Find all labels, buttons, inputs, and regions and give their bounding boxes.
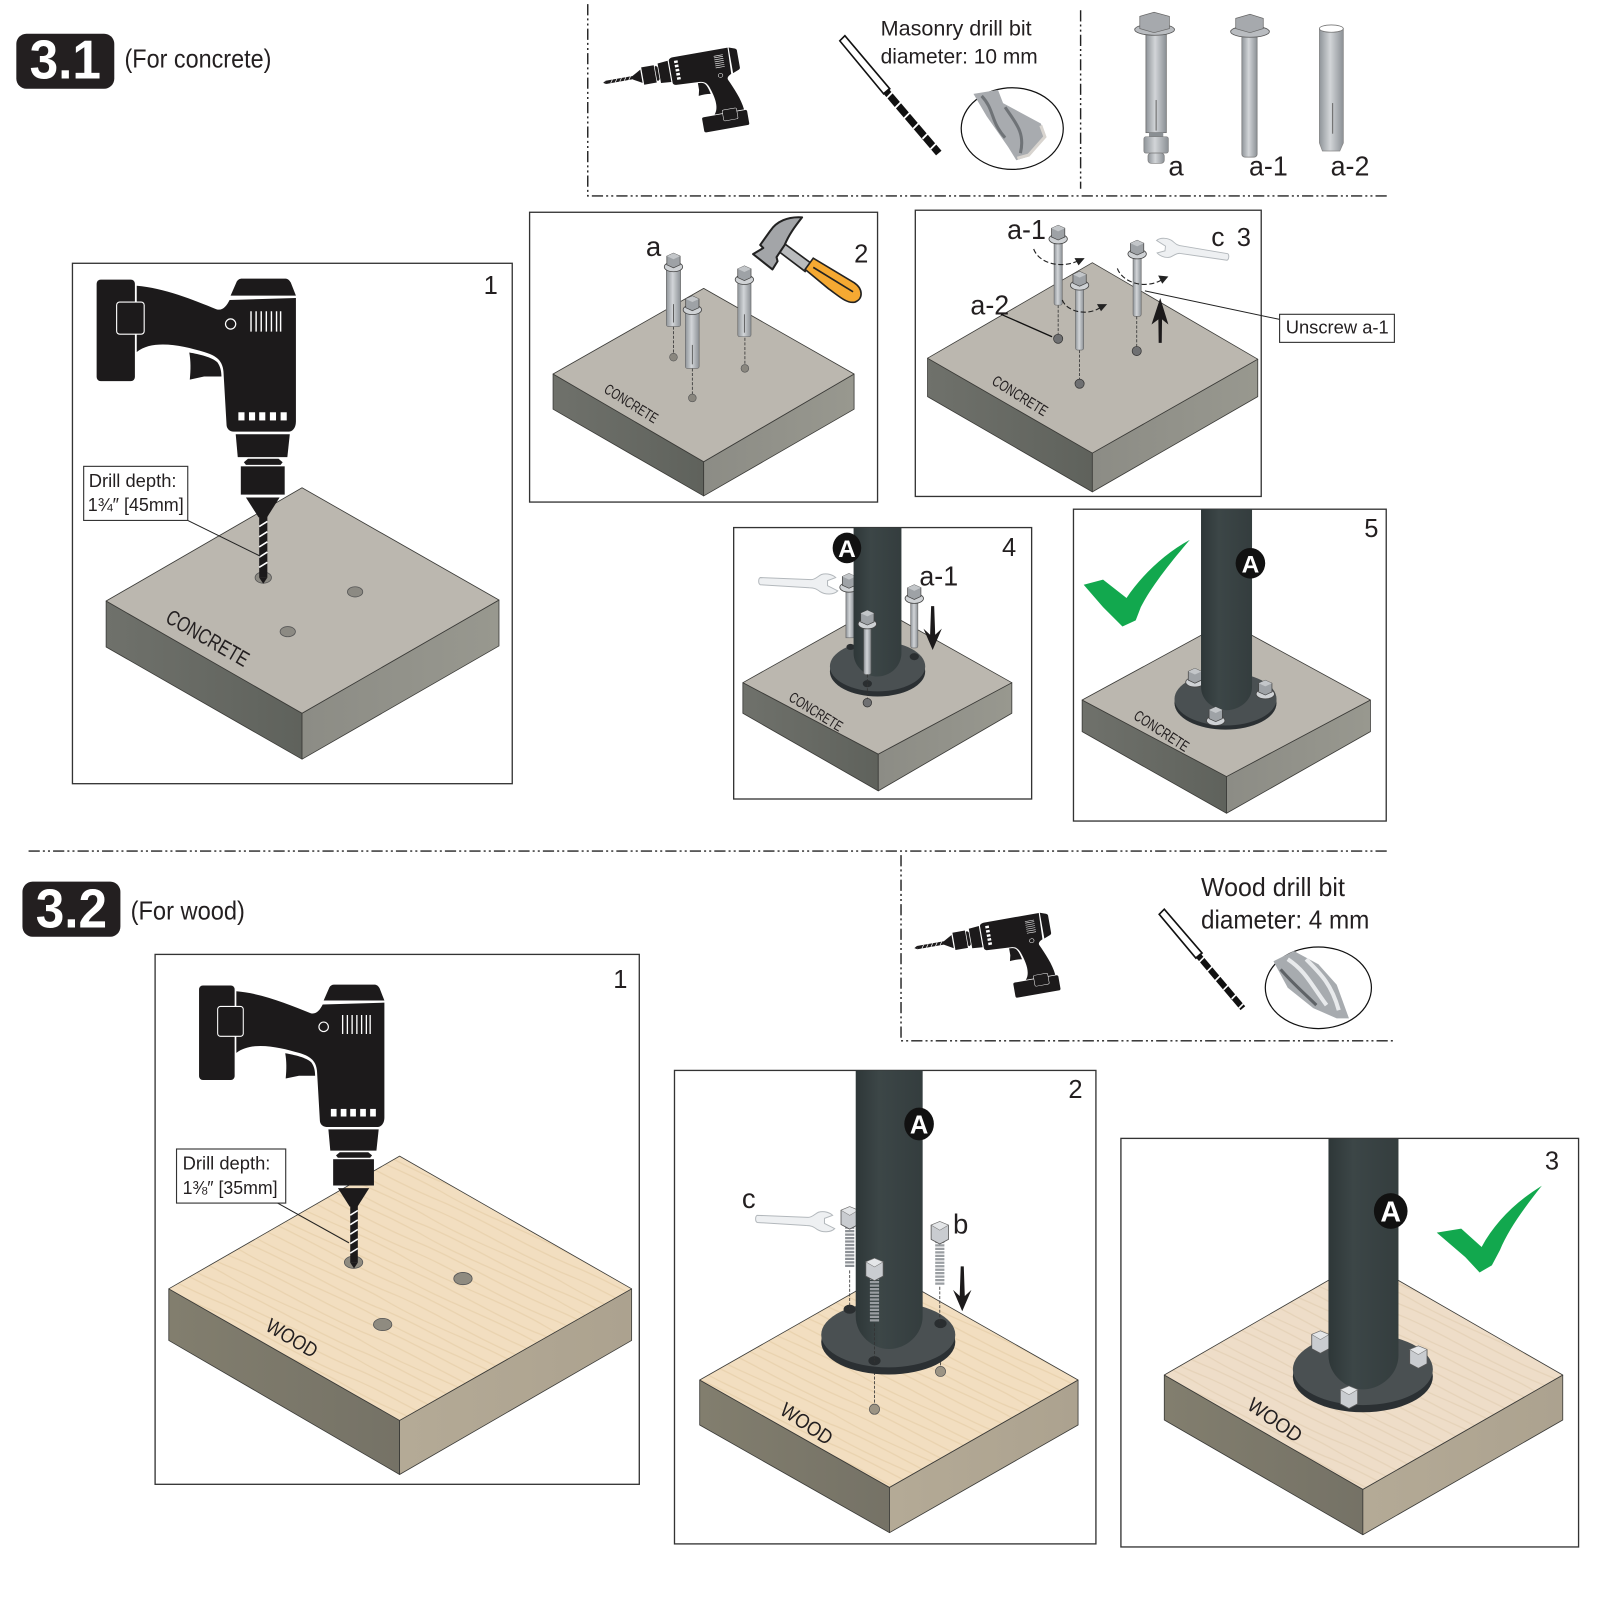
heading badge: 3.1: 3.1 bbox=[30, 29, 101, 91]
icon: large drill bbox=[199, 985, 384, 1268]
step number 1: 1 bbox=[613, 966, 627, 994]
panel: wood step 2 bbox=[674, 1070, 1096, 1544]
text: masonry drill bit diameter: Masonry drill bit bbox=[881, 18, 1032, 41]
lag bolt behind pole bbox=[841, 1207, 858, 1309]
slab label: CONCRETE bbox=[989, 373, 1050, 420]
step number 5: 5 bbox=[1364, 515, 1378, 543]
heading text: for concrete: (For concrete) bbox=[124, 45, 271, 73]
slab label: CONCRETE bbox=[786, 690, 845, 735]
leader: a-2 bbox=[1001, 314, 1052, 337]
icon: bolt a-1 bbox=[1231, 14, 1269, 157]
concrete slab bbox=[553, 288, 854, 496]
wood block bbox=[169, 1156, 632, 1475]
holes in wood bbox=[869, 1362, 946, 1414]
block label: WOOD bbox=[262, 1315, 321, 1363]
icon: green check mark bbox=[1084, 540, 1190, 627]
step number 1: 1 bbox=[484, 272, 498, 300]
badge A: A bbox=[838, 536, 856, 563]
panel: concrete step 1 bbox=[72, 263, 512, 784]
labels: a-1, a-2, c, 3: c bbox=[1211, 222, 1224, 252]
badge A: A bbox=[910, 1112, 928, 1140]
bolts bbox=[858, 585, 923, 675]
wood block bbox=[1164, 1260, 1563, 1535]
lag bolts bbox=[866, 1222, 948, 1362]
drill holes bbox=[255, 572, 363, 637]
icon: wood drill bit bbox=[1159, 909, 1246, 1008]
icon: wrench bbox=[1155, 237, 1230, 264]
bolts a-1 bbox=[1049, 225, 1146, 350]
icon: sleeve a-2 bbox=[1319, 25, 1343, 151]
base plate bbox=[1293, 1334, 1433, 1412]
labels: a-1, a-2, c, 3 bbox=[970, 214, 1251, 320]
pole bbox=[854, 528, 901, 677]
labels: c, b bbox=[742, 1183, 968, 1240]
pole bbox=[856, 1070, 923, 1349]
base plate bbox=[821, 1302, 955, 1375]
arrow: down bbox=[923, 606, 942, 650]
text: wood drill bit diameter: diameter: 4 mm bbox=[1201, 907, 1369, 935]
icon: large drill bbox=[97, 279, 296, 584]
panel: wood step 3 bbox=[1121, 1138, 1579, 1547]
icon: masonry drill bit bbox=[840, 36, 939, 153]
arrow: down bbox=[953, 1266, 971, 1311]
callout: drill depth: Drill depth: bbox=[183, 1152, 270, 1173]
pole bbox=[1328, 1139, 1398, 1389]
block label: WOOD bbox=[776, 1399, 836, 1450]
hole in concrete bbox=[863, 675, 872, 707]
labels: a, a-1, a-2 bbox=[1168, 151, 1369, 182]
front bolt bbox=[1340, 1386, 1358, 1408]
slab label: CONCRETE bbox=[601, 382, 661, 427]
panel: concrete step 3 bbox=[915, 210, 1261, 496]
panel: concrete step 5 bbox=[1073, 509, 1386, 821]
step number 3: 3 bbox=[1545, 1147, 1559, 1175]
step number 2: 2 bbox=[854, 240, 868, 268]
holes and guide lines bbox=[670, 327, 749, 402]
icon: green check mark bbox=[1437, 1186, 1542, 1272]
concrete slab bbox=[106, 488, 499, 759]
labels: c, b: c bbox=[742, 1183, 756, 1214]
slab label: CONCRETE bbox=[162, 605, 253, 672]
step number 2: 2 bbox=[1068, 1076, 1083, 1104]
icon: wrench bbox=[759, 574, 838, 594]
wood block bbox=[700, 1272, 1078, 1533]
bolts bbox=[1312, 1331, 1427, 1368]
heading badge: 3.2: 3.2 bbox=[36, 878, 107, 940]
concrete slab bbox=[743, 607, 1012, 791]
labels: a-1, a-2, c, 3: 3 bbox=[1237, 224, 1251, 252]
base plate bbox=[1174, 672, 1277, 730]
callout: drill depth bbox=[84, 466, 260, 556]
divider bbox=[29, 850, 1389, 852]
icon: small drill bbox=[912, 911, 1061, 1014]
base plate bbox=[830, 641, 925, 696]
labels: a, a-1, a-2: a bbox=[1168, 151, 1184, 182]
drill holes bbox=[344, 1256, 472, 1331]
bolt behind pole bbox=[840, 573, 858, 638]
badge A: A bbox=[1380, 1196, 1401, 1228]
callout: drill depth bbox=[177, 1149, 349, 1243]
anchors bbox=[664, 253, 754, 368]
labels: a, a-1, a-2: a-1 bbox=[1249, 151, 1288, 182]
panel: wood step 1 bbox=[155, 954, 639, 1484]
concrete slab bbox=[928, 263, 1258, 492]
panel: wood tools bbox=[901, 855, 1395, 1041]
labels: a, a-1, a-2: a-2 bbox=[1331, 151, 1369, 182]
icon: hammer bbox=[753, 217, 861, 302]
holes and guide lines bbox=[1054, 305, 1141, 388]
callout: drill depth: 1¾″ [45mm] bbox=[88, 494, 184, 515]
badge A bbox=[904, 1108, 934, 1140]
badge A bbox=[1374, 1193, 1408, 1229]
block label: WOOD bbox=[1243, 1394, 1306, 1447]
labels: c, b: b bbox=[953, 1209, 968, 1240]
labels: a-1, a-2, c, 3: a-1 bbox=[1007, 214, 1046, 245]
front bolt bbox=[1207, 707, 1225, 726]
arrow: up bbox=[1152, 298, 1168, 343]
icon: masonry bit tip close-up bbox=[961, 88, 1063, 169]
icon: wrench bbox=[756, 1212, 835, 1232]
slab label: CONCRETE bbox=[1130, 707, 1192, 756]
panel: concrete step 4 bbox=[734, 528, 1032, 799]
callout: drill depth: Drill depth: bbox=[89, 470, 177, 491]
icon: wood bit tip close-up bbox=[1265, 947, 1371, 1029]
bolts bbox=[1186, 668, 1274, 699]
heading text: for wood: (For wood) bbox=[131, 897, 245, 925]
text: wood drill bit diameter: Wood drill bit bbox=[1201, 874, 1345, 902]
label: a-1: a-1 bbox=[919, 561, 958, 592]
icon: anchor a bbox=[1135, 12, 1174, 163]
text: masonry drill bit diameter: diameter: 10 mm bbox=[881, 45, 1038, 68]
badge A bbox=[1236, 548, 1265, 579]
concrete slab bbox=[1082, 621, 1370, 813]
badge A bbox=[833, 533, 861, 563]
panel: concrete step 2 bbox=[530, 212, 878, 502]
icon: small drill bbox=[601, 46, 750, 148]
panel: concrete tools and parts bbox=[588, 4, 1389, 196]
badge A: A bbox=[1242, 551, 1260, 578]
labels: a-1, a-2, c, 3: a-2 bbox=[970, 289, 1009, 320]
label: a: a bbox=[646, 231, 662, 262]
callout: drill depth: 1⅜″ [35mm] bbox=[183, 1177, 278, 1198]
pole bbox=[1201, 509, 1252, 710]
rotation arrows bbox=[1034, 249, 1168, 312]
callout: unscrew a-1: Unscrew a-1 bbox=[1286, 317, 1389, 338]
callout: unscrew a-1 bbox=[1145, 291, 1394, 342]
step number 4: 4 bbox=[1002, 534, 1016, 562]
